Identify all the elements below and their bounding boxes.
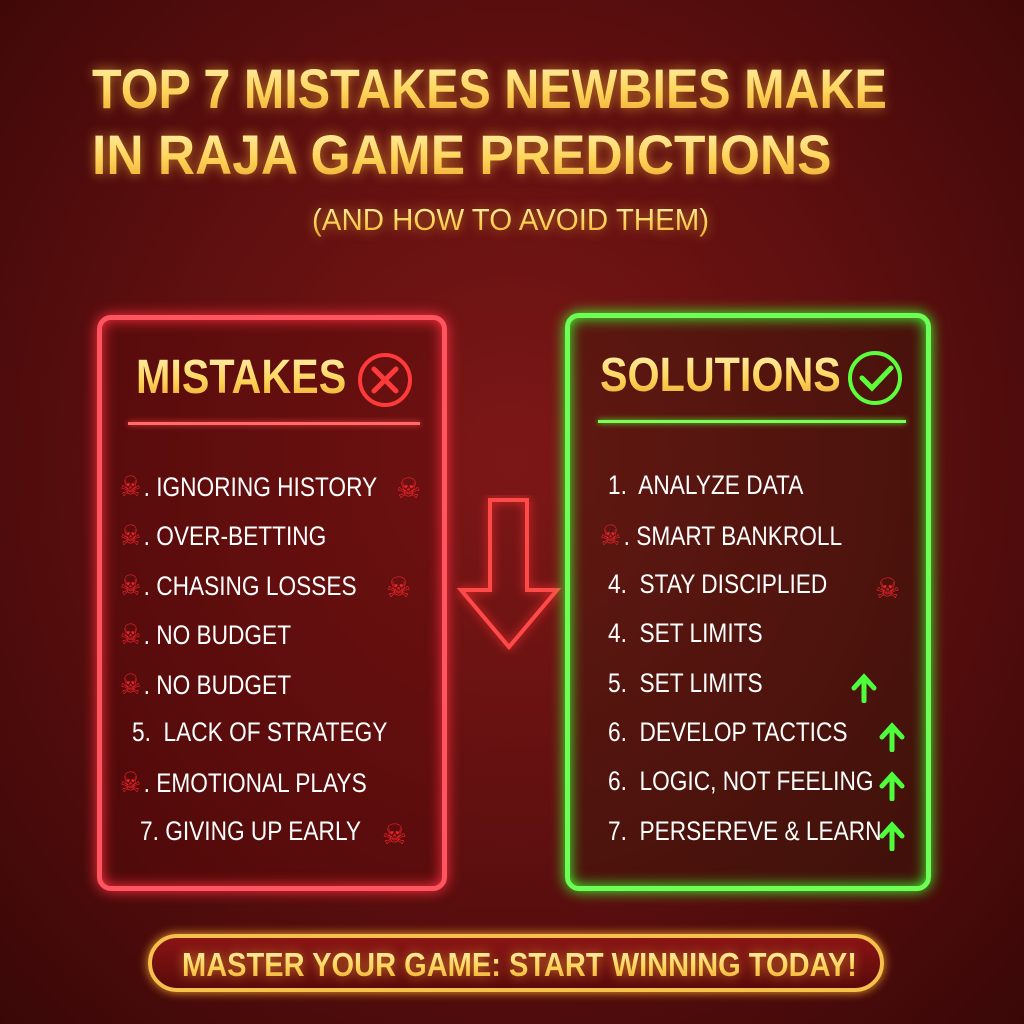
call to action button: MASTER YOUR GAME: START WINNING TODAY! <box>182 946 857 983</box>
solutions list: 6. DEVELOP TACTICS <box>608 717 847 747</box>
solutions list: 5. SET LIMITS <box>608 668 763 698</box>
mistakes list: ☠. NO BUDGET <box>120 619 291 650</box>
icon: x circle <box>358 353 412 407</box>
mistakes list: ☠ <box>386 572 411 603</box>
mistakes list: ☠. CHASING LOSSES <box>120 570 357 601</box>
solutions list: 4. STAY DISCIPLIED <box>608 569 827 599</box>
solutions list: 7. PERSEREVE & LEARN <box>608 816 882 846</box>
title <box>88 57 889 186</box>
solutions list: 4. SET LIMITS <box>608 618 763 648</box>
mistakes list: ☠. OVER-BETTING <box>120 520 326 551</box>
panel: solutions <box>565 313 931 891</box>
mistakes list: ☠ <box>396 473 421 504</box>
heading: mistakes: MISTAKES <box>136 351 346 404</box>
mistakes list: 5. LACK OF STRATEGY <box>132 717 387 747</box>
mistakes list: ☠. NO BUDGET <box>120 669 291 700</box>
solutions list: 1. ANALYZE DATA <box>608 470 803 500</box>
title: IN RAJA GAME PREDICTIONS <box>92 123 831 186</box>
panel: mistakes <box>97 315 447 891</box>
mistakes list <box>120 471 421 850</box>
title: TOP 7 MISTAKES NEWBIES MAKE <box>92 57 887 120</box>
solutions list <box>600 470 904 851</box>
solutions list: ☠ <box>875 573 900 604</box>
heading: solutions: SOLUTIONS <box>600 349 841 402</box>
call to action button <box>148 934 884 992</box>
mistakes list: ☠ <box>382 819 407 850</box>
solutions list: ☠. SMART BANKROLL <box>600 520 842 551</box>
arrow: down <box>455 495 563 654</box>
mistakes list: ☠. EMOTIONAL PLAYS <box>120 767 367 798</box>
subtitle: (AND HOW TO AVOID THEM) <box>312 202 709 237</box>
solutions list: 6. LOGIC, NOT FEELING <box>608 766 874 796</box>
icon: check circle <box>848 351 902 405</box>
mistakes list: ☠. IGNORING HISTORY <box>120 471 377 502</box>
mistakes list: 7. GIVING UP EARLY <box>140 816 361 846</box>
